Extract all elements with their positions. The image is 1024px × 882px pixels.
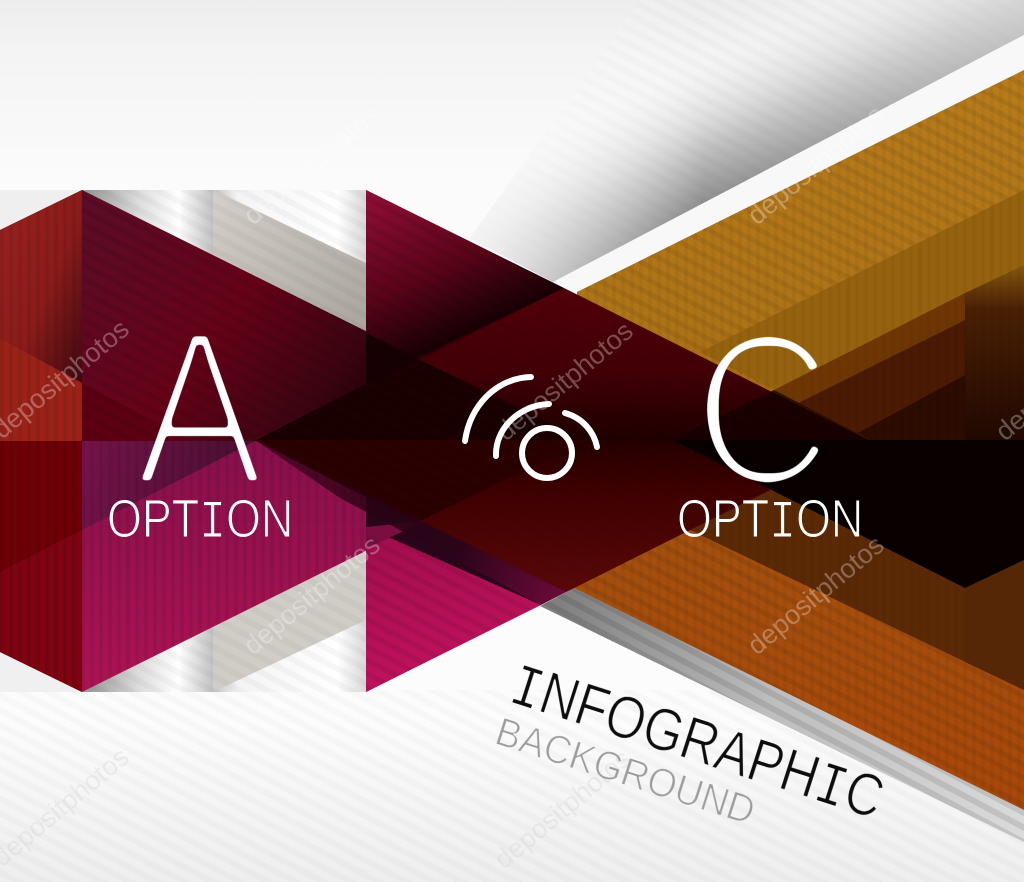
panel: arrow B upper half [255, 190, 870, 441]
panel: silver strips behind arrow A [82, 190, 366, 692]
watermarks: depositphotos [491, 316, 639, 447]
letter A: A [135, 284, 264, 531]
letter C: C [694, 290, 833, 530]
label: OPTION under A: OPTION [107, 488, 293, 553]
panel: right dark strip [965, 560, 1024, 690]
title: INFOGRAPHIC: INFOGRAPHIC [501, 650, 892, 837]
watermarks: depositphotos [238, 100, 386, 231]
panel: central dark rhombus [255, 288, 870, 605]
icon: concentric arcs and ring [465, 377, 597, 478]
panel: arrow B lower half [366, 440, 870, 692]
panel: arrow A maroon upper half [82, 190, 587, 441]
panel: left hexagon red side [0, 190, 82, 692]
subtitle: BACKGROUND: BACKGROUND [490, 710, 760, 834]
panel: right black band [673, 440, 1024, 588]
watermarks: depositphotos [489, 744, 637, 875]
label: OPTION under C: OPTION [677, 488, 863, 553]
watermarks: depositphotos [742, 100, 890, 231]
panel: option C orange arrow [574, 70, 1024, 810]
watermarks: depositphotos [742, 530, 890, 661]
panel: arrow A magenta lower half [82, 441, 587, 692]
watermarks: depositphotos [238, 530, 386, 661]
